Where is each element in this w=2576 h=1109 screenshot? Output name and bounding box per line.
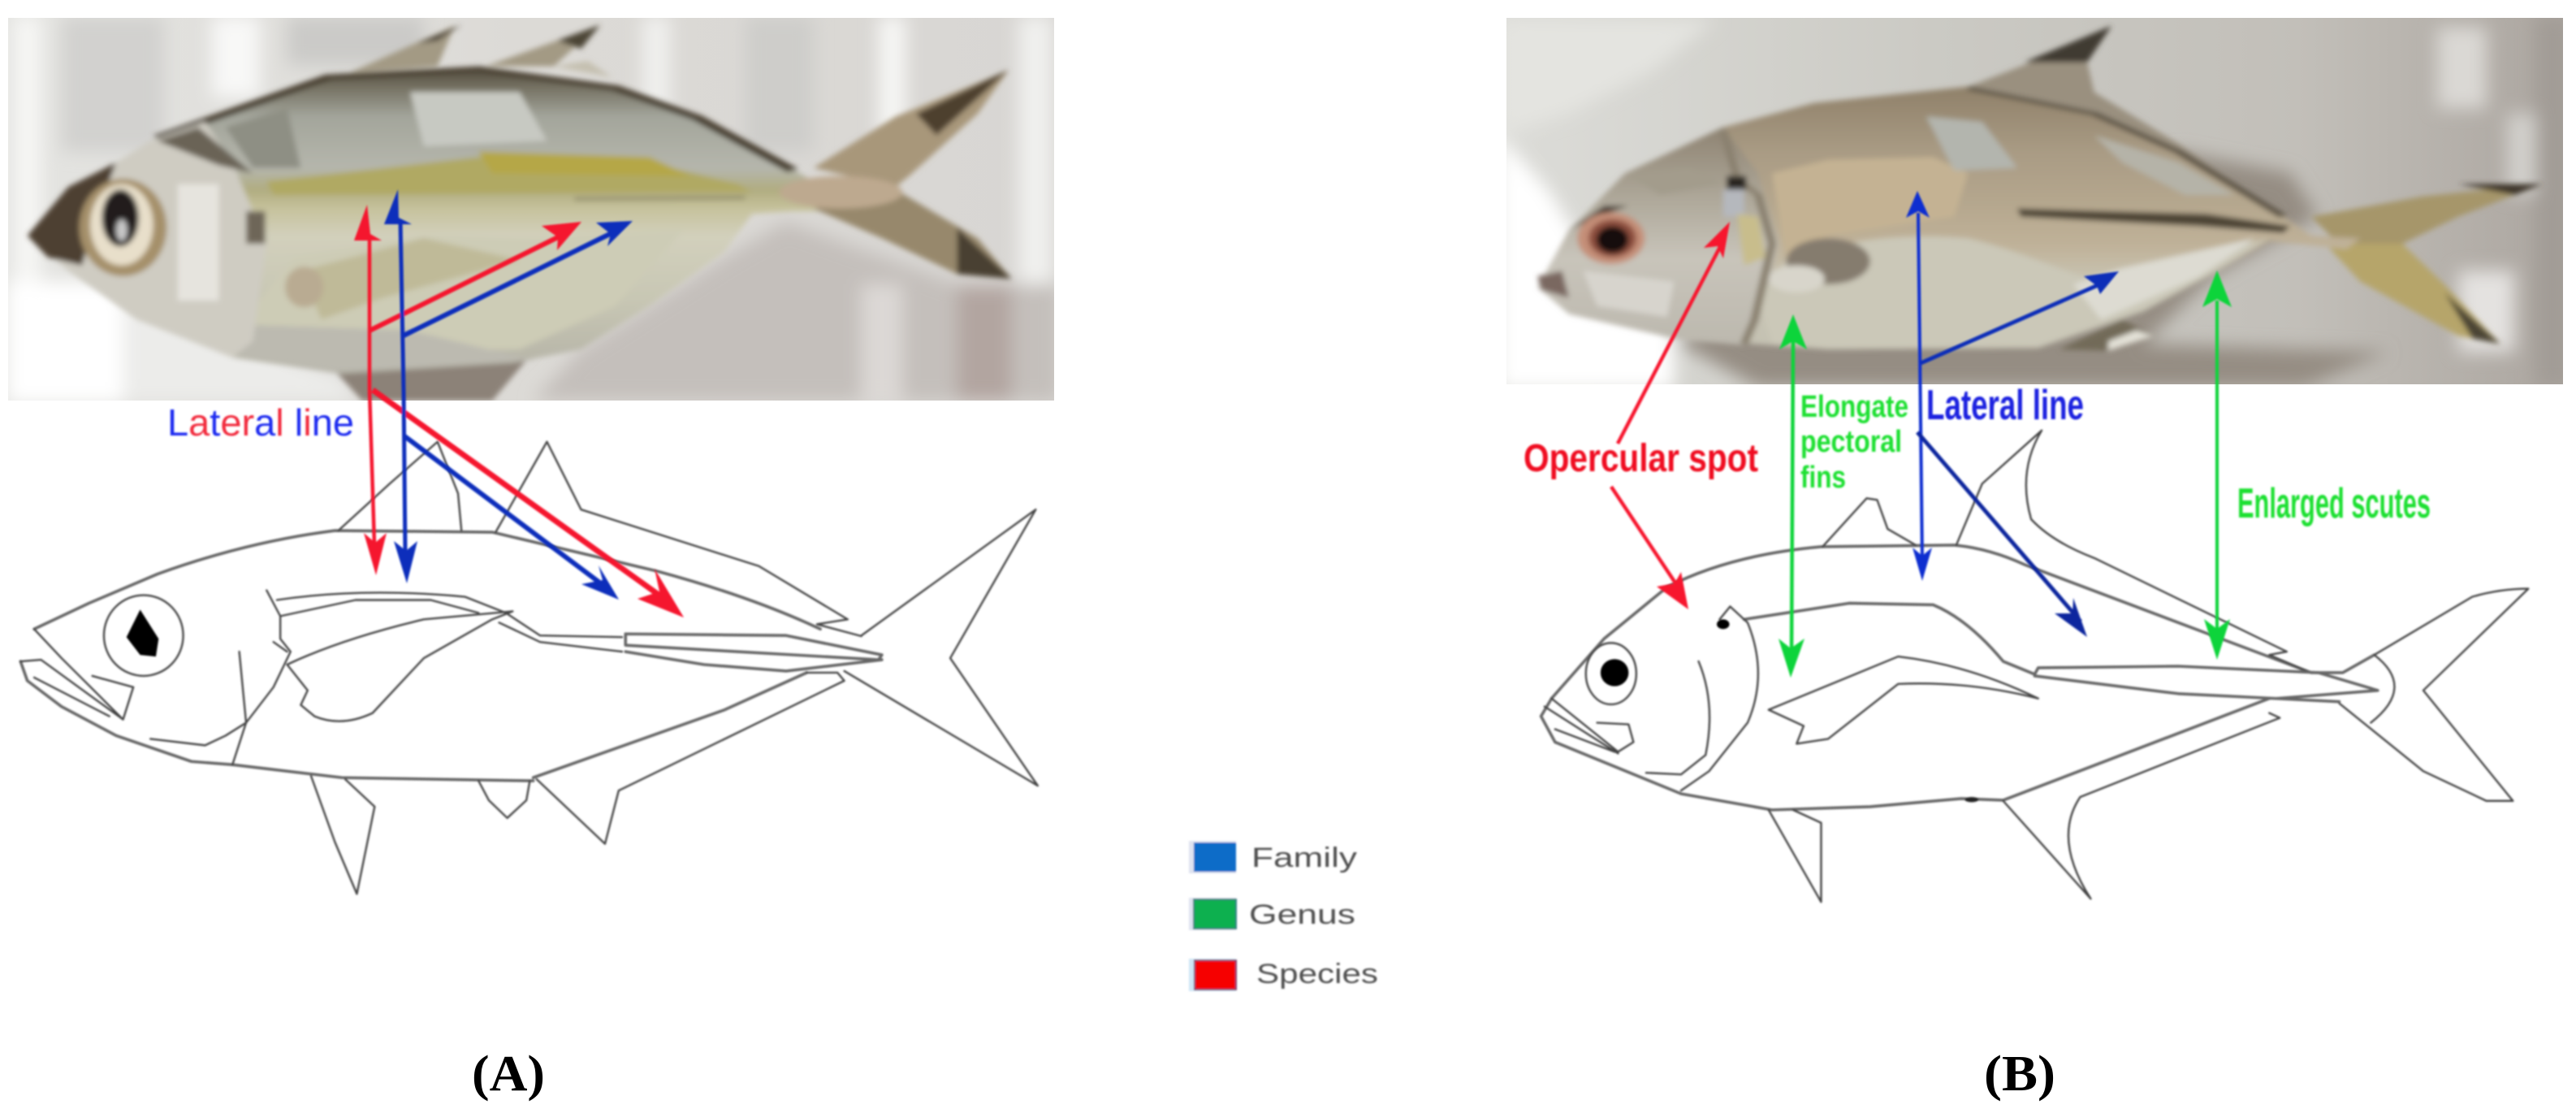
label: Elongate pectoral fins: Elongate xyxy=(1800,390,1908,424)
label: Elongate pectoral fins: fins xyxy=(1800,461,1846,495)
panel label B: (B) xyxy=(1984,1046,2055,1102)
label: Opercular spot: Opercular spot xyxy=(1524,437,1758,480)
shadow under belly xyxy=(335,360,526,401)
dorsal fin xyxy=(1970,60,2198,158)
scutes line xyxy=(2017,209,2290,233)
belly xyxy=(1855,234,2264,278)
head xyxy=(1537,128,1779,345)
pale streaks on back xyxy=(410,92,547,146)
fish A line drawing xyxy=(20,442,1038,894)
label: Elongate pectoral fins: pectoral xyxy=(1800,425,1902,459)
legend: Species xyxy=(1189,959,1378,991)
legend: Family: Family xyxy=(1251,843,1357,873)
back dark line xyxy=(158,69,793,171)
tail xyxy=(2311,184,2543,252)
panel: photo of fish B xyxy=(1499,16,2570,390)
label: Lateral line A: Lateral line xyxy=(167,401,354,444)
body xyxy=(1722,84,2360,348)
arrows: panel B xyxy=(1611,191,2232,678)
eye xyxy=(80,179,166,276)
fins xyxy=(348,26,455,73)
arrow: red opercular spot to drawing xyxy=(1611,487,1688,609)
legend: Species: Species xyxy=(1256,959,1378,990)
label: Enlarged scutes: Enlarged scutes xyxy=(2237,480,2431,527)
arrow: blue family xyxy=(384,189,633,600)
arrow: green enlarged scutes xyxy=(2202,271,2232,660)
eye xyxy=(1577,213,1645,264)
arrows: panel A xyxy=(354,189,684,617)
fish B line drawing xyxy=(1541,431,2528,902)
operculum xyxy=(1723,130,1772,344)
arrow: blue lateral line xyxy=(1906,191,2119,637)
legend: Genus xyxy=(1189,898,1355,930)
fish body xyxy=(205,68,819,376)
legend xyxy=(1189,841,1378,991)
legend: Family xyxy=(1189,841,1357,873)
back line xyxy=(1969,88,2284,217)
legend: Genus: Genus xyxy=(1249,899,1355,930)
label: Lateral line B: Lateral line xyxy=(1926,382,2084,429)
panel label A: (A) xyxy=(472,1046,545,1102)
ventral fin xyxy=(2062,320,2141,353)
yellow stripe xyxy=(266,157,752,195)
head xyxy=(65,117,261,357)
belly highlight xyxy=(257,309,596,350)
arrow: red opercular spot to photo xyxy=(1618,222,1730,444)
arrow: green elongate pectoral fins xyxy=(1779,314,1807,678)
tail xyxy=(814,71,1009,187)
panel: photo of fish A xyxy=(6,16,1060,404)
arrow: red species xyxy=(354,205,684,617)
label: Elongate pectoral fins xyxy=(1800,390,1908,495)
